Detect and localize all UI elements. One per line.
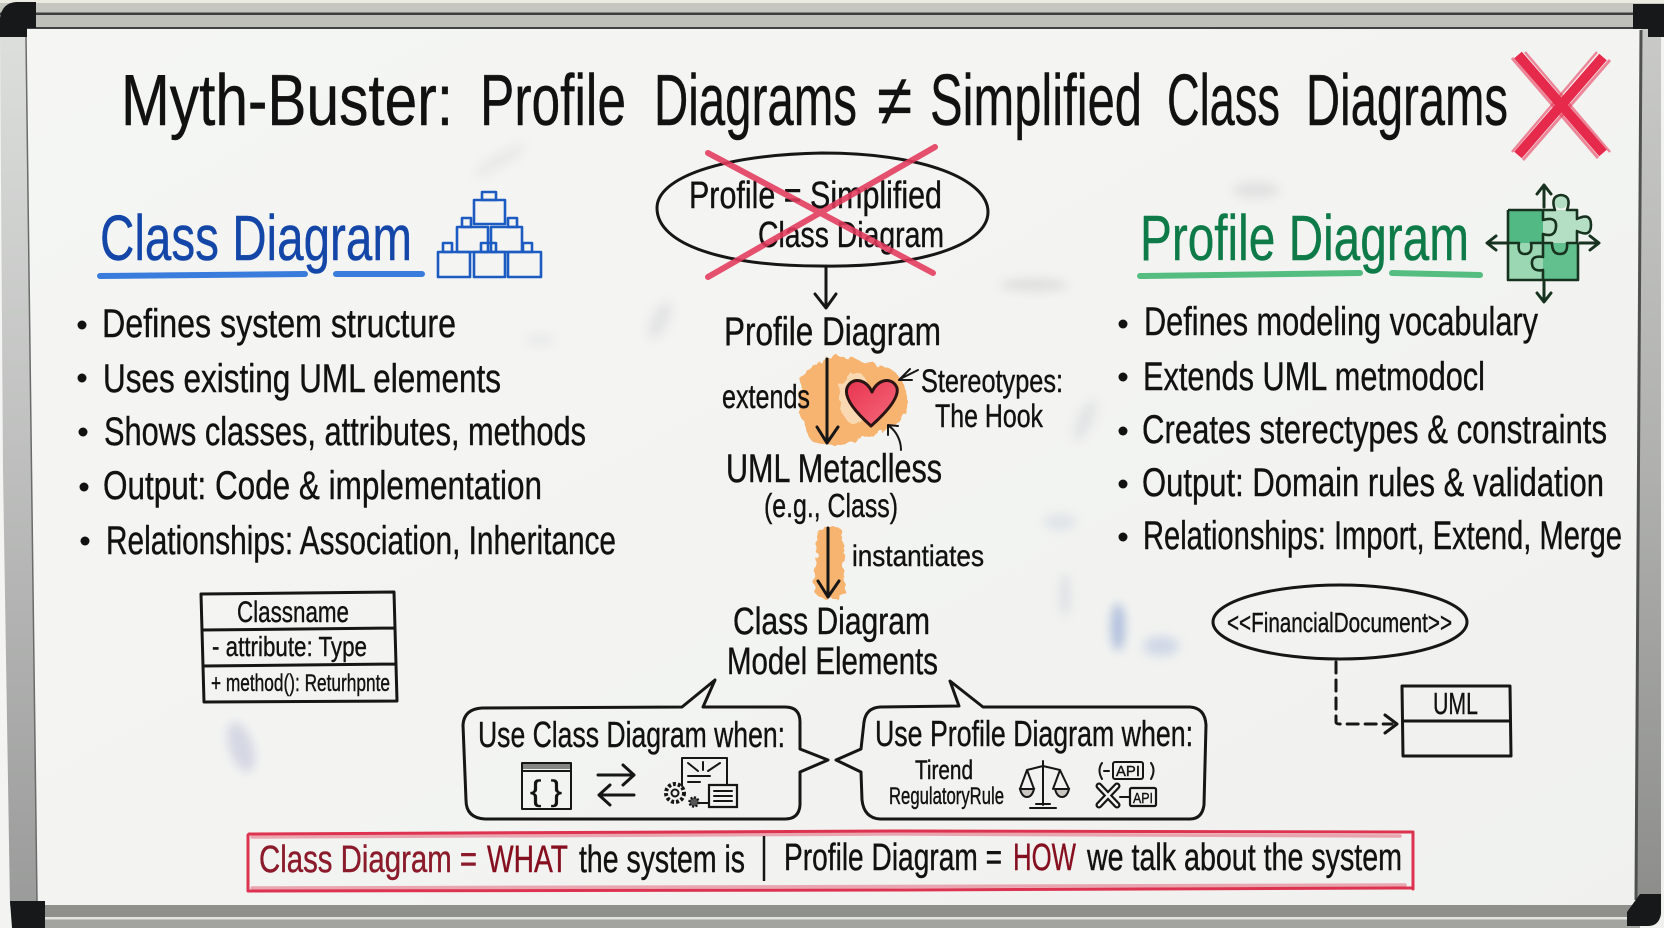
speech bubble: class diagram	[463, 680, 828, 819]
class name: Classname	[237, 596, 349, 629]
bullet list: class diagram	[78, 302, 616, 563]
arrow: to heart from below	[888, 425, 901, 450]
center flow	[722, 310, 1063, 683]
title: Simplified	[930, 61, 1142, 141]
takeaway: the system is: the system is	[579, 839, 745, 881]
icon: api top	[1100, 762, 1154, 780]
arrow: to heart from stereotypes	[899, 369, 918, 380]
speech bubble: profile diagram	[836, 681, 1206, 819]
label: class diagram model elements line 1: Class Diagram	[733, 601, 930, 643]
eraser smudges	[222, 139, 1280, 775]
label: extends: extends	[722, 378, 810, 415]
method row: + method(): Returhpnte	[211, 670, 390, 697]
label: class diagram model elements line 2: Model Elements	[727, 641, 938, 683]
heading: profile diagram: Profile Diagram	[1140, 202, 1469, 274]
orange highlight: instantiates	[813, 527, 847, 599]
arrow: instantiates	[818, 528, 839, 597]
title: Class	[1167, 61, 1280, 141]
stereotype text: <<FinancialDocument>>	[1227, 607, 1452, 638]
bubble heading: Use Class Diagram when:	[478, 714, 785, 755]
label: the hook: The Hook	[935, 398, 1044, 434]
label: stereotypes: Stereotypes:	[921, 363, 1063, 399]
icon: code window	[522, 763, 571, 809]
arrow: extends	[817, 359, 838, 443]
takeaway: we talk about the system: we talk about the system	[1086, 837, 1402, 879]
label: uml metaclass: UML Metaclless	[726, 447, 942, 491]
panel: class diagram	[78, 192, 616, 702]
label: instantiates: instantiates	[852, 540, 984, 573]
icon: scales	[1020, 761, 1069, 808]
title: Diagrams	[654, 61, 857, 141]
icon: code window: { }	[530, 775, 562, 808]
myth text line 2: Class Diagram	[758, 214, 944, 255]
heading: class diagram: Class Diagram	[100, 202, 412, 274]
stereotype ellipse	[1213, 585, 1467, 659]
bullet 1: Defines modeling vocabulary	[1144, 300, 1538, 344]
takeaway: what: WHAT	[487, 839, 568, 881]
icon: puzzle with arrows	[1487, 185, 1599, 302]
takeaway: class diagram equals: Class Diagram =	[259, 839, 477, 881]
bullet 3: Shows classes, attributes, methods	[104, 410, 586, 454]
bubble heading: Use Profile Diagram when:	[875, 713, 1193, 754]
uml class box	[201, 592, 397, 702]
uml box	[1402, 686, 1511, 756]
label: profile diagram: Profile Diagram	[724, 310, 941, 354]
takeaway: profile diagram equals: Profile Diagram =	[784, 837, 1002, 879]
icon: heart	[846, 381, 897, 426]
title	[121, 61, 1508, 141]
icon: stacked blocks	[438, 192, 541, 277]
myth ellipse	[657, 147, 988, 277]
icon: tools and api: API	[1133, 790, 1153, 807]
takeaway: divider	[763, 836, 765, 881]
red cross over myth	[708, 147, 935, 277]
title: ≠	[877, 61, 912, 141]
bullet 1: Defines system structure	[102, 302, 456, 346]
panel: profile diagram	[1118, 185, 1622, 756]
bullet 2: Uses existing UML elements	[103, 357, 501, 401]
icon: api top: API	[1116, 763, 1140, 780]
bullet list: profile diagram	[1118, 300, 1622, 558]
icon: two-way arrows	[598, 765, 634, 805]
myth text line 1: Profile = Simplified	[689, 175, 942, 217]
label: eg class: (e.g., Class)	[764, 487, 898, 524]
heading underline: class diagram	[100, 274, 422, 276]
attribute row: - attribute: Type	[212, 631, 367, 662]
trend label: Tirend	[915, 755, 973, 785]
dashed arrow: stereotype to uml	[1336, 662, 1397, 733]
title: Myth-Buster:	[121, 61, 453, 141]
bullet 4: Output: Code & implementation	[103, 464, 542, 508]
icon: big red X	[1512, 52, 1610, 160]
arrow: myth to profile diagram	[815, 266, 836, 308]
title: Profile	[480, 61, 626, 141]
title: Diagrams	[1306, 61, 1508, 141]
uml box label: UML	[1433, 686, 1478, 721]
icon: tools and api	[1099, 786, 1156, 807]
takeaway box	[248, 831, 1413, 891]
takeaway: how: HOW	[1013, 837, 1076, 879]
bullet 5: Relationships: Association, Inheritance	[106, 519, 616, 563]
bullet 2: Extends UML metmodocl	[1143, 355, 1485, 399]
icon: documents and gear	[666, 758, 737, 807]
regulatory rule label: RegulatoryRule	[889, 783, 1004, 810]
orange highlight: extends	[799, 356, 907, 445]
heading underline: profile diagram	[1140, 273, 1480, 276]
